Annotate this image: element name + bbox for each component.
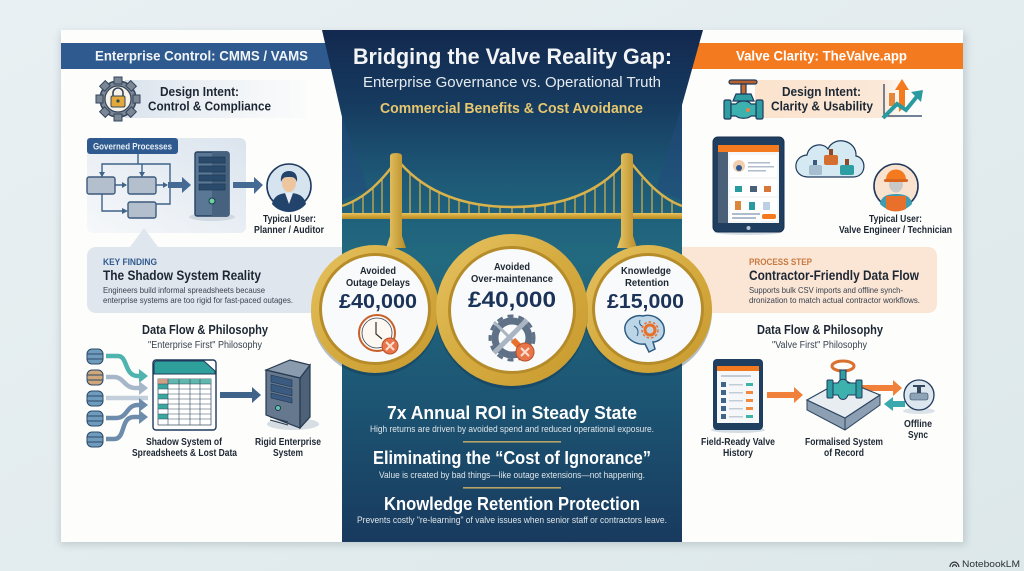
- title: Bridging the Valve Reality Gap:: [353, 44, 672, 69]
- stat: knowledge retention: £15,000: [607, 291, 684, 313]
- callout: key finding: The Shadow System Reality: [103, 267, 261, 283]
- label: offline sync: Offline: [904, 418, 932, 430]
- callout: key finding: Engineers build informal spreadsheets because: [103, 285, 265, 295]
- icon: wrench, screwdriver and gear: [490, 316, 534, 361]
- text block: cost of ignorance: [373, 447, 651, 480]
- arrow: system to offline sync: [862, 380, 902, 396]
- label: offline sync: [904, 418, 932, 441]
- icon: technician avatar: [874, 164, 918, 211]
- label: field-ready valve history: Field-Ready Valve: [701, 436, 775, 448]
- panel: centre column: [311, 30, 712, 542]
- text block: annual ROI: 7x Annual ROI in Steady State: [387, 402, 637, 423]
- icon: offline sync: [903, 380, 935, 414]
- callout: key finding: KEY FINDING: [103, 257, 157, 268]
- label: field-ready valve history: History: [723, 447, 753, 459]
- text block: annual ROI: [370, 402, 654, 434]
- text block: knowledge retention protection: Knowledge Retention Protection: [384, 493, 640, 514]
- stat: avoided over-maintenance: Over-maintenance: [471, 273, 553, 285]
- callout: key finding: enterprise systems are too rigid for fast-paced outages.: [103, 295, 293, 305]
- stat: avoided outage delays: Outage Delays: [346, 277, 410, 289]
- label: typical user planner: Planner / Auditor: [254, 225, 324, 236]
- stat: knowledge retention: Knowledge: [621, 265, 671, 277]
- card shadow: [60, 33, 966, 545]
- icon: growth chart: [883, 79, 923, 118]
- icon: databases: [87, 349, 103, 447]
- text block: cost of ignorance: Value is created by bad things—like outage extensions—not happening.: [379, 470, 645, 480]
- icon: clock: [359, 315, 398, 354]
- flowchart: [87, 154, 170, 218]
- design intent band: Clarity & Usability: [771, 99, 874, 114]
- stat: avoided over-maintenance: £40,000: [468, 287, 556, 312]
- stat: avoided over-maintenance: Avoided: [494, 261, 530, 273]
- stat: knowledge retention: Retention: [625, 277, 669, 289]
- icon: server tower: [189, 152, 235, 221]
- label: shadow system: [132, 436, 237, 459]
- callout: process step: [670, 247, 937, 313]
- heading: data flow right: "Valve First" Philosophy: [772, 340, 867, 351]
- watermark: NotebookLM: NotebookLM: [962, 559, 1020, 570]
- label: typical user technician: [839, 214, 952, 236]
- title: [353, 44, 672, 117]
- icon: system of record platform: [807, 380, 880, 430]
- icon: gear with padlock: [96, 77, 140, 121]
- label: governed processes: [87, 138, 178, 154]
- label: shadow system: Spreadsheets & Lost Data: [132, 447, 237, 459]
- icon: cloud with valves: [796, 141, 864, 177]
- title: Commercial Benefits & Cost Avoidance: [380, 101, 643, 117]
- design intent band: Design Intent:: [160, 84, 239, 99]
- icon: spreadsheet: [153, 360, 216, 430]
- text block: cost of ignorance: Eliminating the “Cost of Ignorance”: [373, 447, 651, 468]
- arrow to user: [233, 177, 263, 194]
- governed processes panel: [87, 138, 246, 233]
- stat: avoided outage delays: £40,000: [339, 291, 417, 313]
- label: governed processes: Governed Processes: [93, 142, 172, 152]
- arrow: tablet to system: [767, 387, 803, 403]
- heading: data flow right: Data Flow & Philosophy: [757, 322, 884, 337]
- arrow to server: [168, 177, 191, 193]
- callout: process step: dronization to match actual contractor workflows.: [749, 295, 920, 305]
- icon: valve: [724, 80, 763, 119]
- design intent band: [125, 80, 305, 118]
- stat: avoided outage delays: [311, 245, 439, 376]
- callout: process step: Contractor-Friendly Data Flow: [749, 267, 919, 283]
- left header bar: [61, 43, 337, 69]
- label: rigid enterprise system: System: [273, 447, 303, 459]
- card: [61, 30, 963, 542]
- label: typical user planner: Typical User:: [263, 214, 316, 225]
- text block: knowledge retention protection: Prevents costly "re-learning" of valve issues when senior staff or contractors leave.: [357, 515, 667, 525]
- label: rigid enterprise system: [255, 436, 321, 459]
- right header bar: Valve Clarity: TheValve.app: [736, 48, 907, 64]
- label: field-ready valve history: [701, 436, 775, 459]
- label: typical user planner: [254, 214, 324, 236]
- icon: valve on platform: [827, 361, 862, 400]
- icon: rigid enterprise server: [266, 360, 319, 430]
- label: typical user technician: Valve Engineer / Technician: [839, 225, 952, 236]
- callout: process step: Supports bulk CSV imports and offline synch-: [749, 285, 903, 295]
- arrow: spreadsheet to system: [220, 387, 261, 403]
- title: Enterprise Governance vs. Operational Truth: [363, 74, 661, 91]
- heading: data flow right: [757, 322, 884, 351]
- heading: data flow left: "Enterprise First" Philosophy: [148, 340, 262, 351]
- label: typical user technician: Typical User:: [869, 214, 922, 225]
- icon: brain with gear: [625, 315, 664, 352]
- arrow: offline sync to system: [884, 397, 905, 411]
- left header bar: Enterprise Control: CMMS / VAMS: [95, 48, 308, 64]
- stat: avoided over-maintenance: [436, 234, 588, 389]
- icon: planner avatar: [267, 164, 311, 212]
- label: offline sync: Sync: [908, 429, 928, 441]
- icon: tablet app: [713, 137, 784, 235]
- label: rigid enterprise system: Rigid Enterprise: [255, 436, 321, 448]
- label: formalised system: of Record: [824, 447, 864, 459]
- right header bar: [688, 43, 963, 69]
- panel: left enterprise control: [61, 43, 357, 459]
- design intent band: [755, 80, 905, 118]
- arrowheads: [139, 369, 148, 424]
- label: formalised system: Formalised System: [805, 436, 883, 448]
- callout: key finding: [87, 228, 357, 313]
- stat: knowledge retention: [584, 245, 712, 376]
- label: formalised system: [805, 436, 883, 459]
- stat: avoided outage delays: Avoided: [360, 265, 396, 277]
- heading: data flow left: Data Flow & Philosophy: [142, 322, 269, 337]
- text block: knowledge retention protection: [357, 493, 667, 525]
- design intent band: Design Intent:: [782, 84, 861, 99]
- panel: right valve clarity: [670, 43, 963, 459]
- callout: process step: PROCESS STEP: [749, 257, 813, 268]
- arrows: data sources to spreadsheet: [106, 356, 148, 439]
- text block: annual ROI: High returns are driven by avoided spend and reduced operational exposure.: [370, 424, 654, 434]
- label: shadow system: Shadow System of: [146, 436, 222, 448]
- design intent band: Control & Compliance: [148, 99, 271, 114]
- icon: field tablet: [711, 359, 765, 433]
- illustration: golden suspension bridge: [342, 153, 682, 248]
- heading: data flow left: [142, 322, 269, 351]
